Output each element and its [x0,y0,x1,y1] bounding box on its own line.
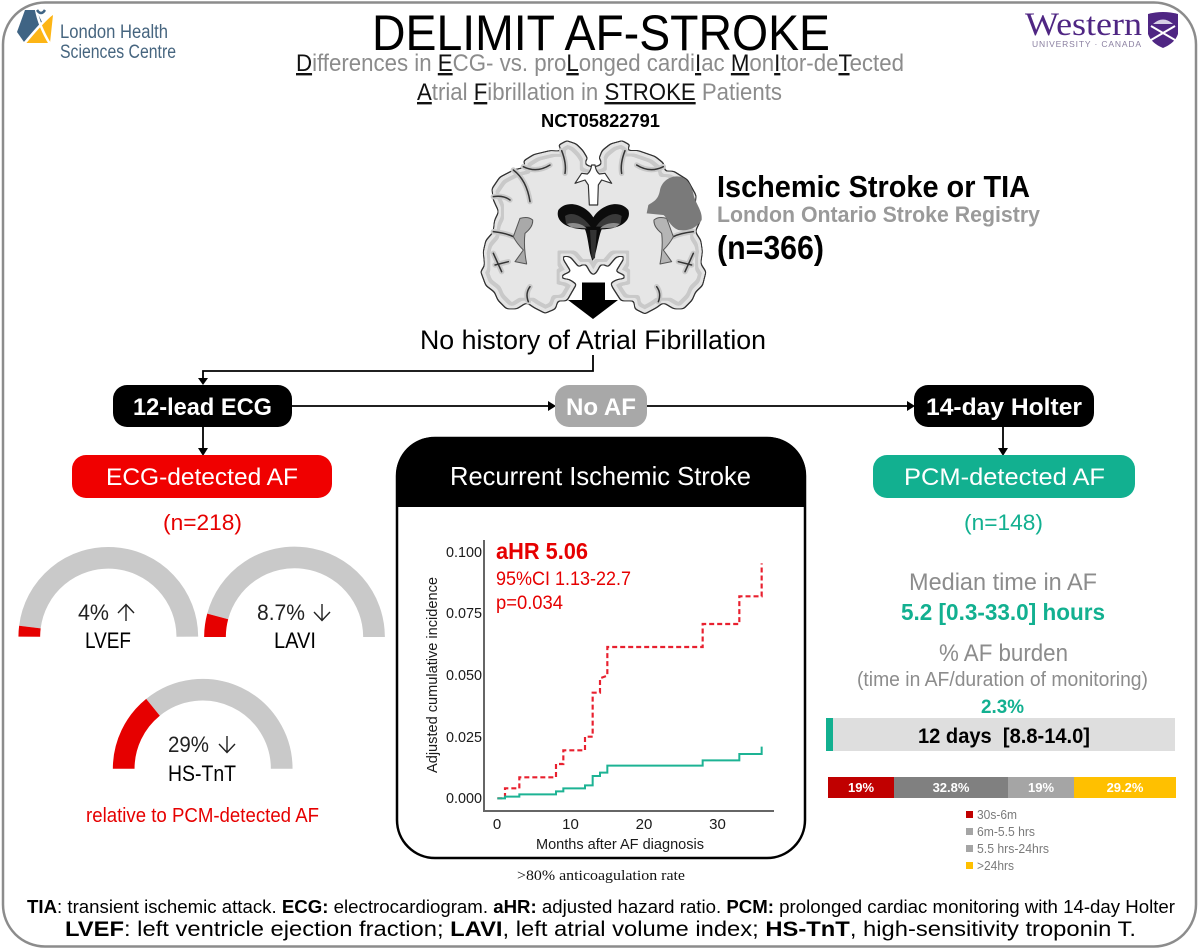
arrow: Holter down [998,427,1008,456]
cohort heading: London Ontario Stroke Registry [717,202,1041,227]
stacked bar: AF episode duration: 29.2% [1107,780,1144,795]
logo: Western University [1025,7,1178,49]
cohort heading [717,169,1041,266]
no history label: No history of Atrial Fibrillation [420,325,766,355]
note: relative to PCM: relative to PCM-detected AF [86,805,319,827]
hazard ratio statistics: 95%CI 1.13-22.7 [496,569,631,590]
legend [966,807,1049,873]
chart: adjusted cumulative incidence: 20 [636,816,652,833]
chart: adjusted cumulative incidence: 0.100 [446,544,482,561]
legend: 6m-5.5 hrs [977,824,1035,839]
gauge: LVEF: 4% [78,600,109,625]
logo: London Health Sciences Centre [17,9,176,63]
arrow: brain down to history [568,282,618,319]
stat: median time in AF: 5.2 [0.3-33.0] hours [901,599,1105,625]
cohort heading: Ischemic Stroke or TIA [717,169,1030,204]
chart: adjusted cumulative incidence: 0.000 [446,790,482,807]
logo: London Health Sciences Centre: London Health [60,22,168,43]
box: ECG-detected AF: ECG-detected AF [106,464,298,491]
curve: PCM-detected AF [497,747,762,798]
box: PCM-detected AF: PCM-detected AF [904,464,1105,491]
box: 14-day Holter: 14-day Holter [926,394,1082,421]
chart: adjusted cumulative incidence: Months after AF diagnosis [536,836,704,853]
logo: Western University: UNIVERSITY · CANADA [1032,39,1141,49]
chart: adjusted cumulative incidence: 0.075 [446,605,482,622]
box: No AF [555,385,647,427]
logo: Western University: Western [1025,7,1142,43]
box: No AF: No AF [566,394,636,421]
cohort heading: (n=366) [717,229,824,266]
box: PCM-detected AF [873,455,1135,498]
stat: AF burden: (time in AF/duration of monitoring) [857,669,1148,691]
stat: AF burden [857,640,1148,718]
stacked bar: AF episode duration: 19% [1028,780,1054,795]
icon: brain with ischemic lesion [480,140,707,315]
legend: 30s-6m [977,807,1017,822]
hazard ratio statistics [496,538,631,614]
gauge: LVEF: LVEF [85,628,131,653]
chart: adjusted cumulative incidence: 30 [709,816,726,833]
subtitle: Differences in ECG- vs. proLonged cardiIac MonItor-deTected [296,50,904,77]
gauge: LVEF [29,558,187,653]
box: 14-day Holter [914,385,1094,427]
label: n=218: (n=218) [163,510,242,535]
legend: >24hrs [977,858,1014,873]
chart: adjusted cumulative incidence [424,538,774,853]
panel heading: Recurrent Ischemic Stroke [450,461,751,491]
title: DELIMIT AF-STROKE [372,5,830,61]
note: anticoagulation rate: >80% anticoagulation rate [517,868,685,884]
footer abbreviations: TIA: transient ischemic attack. ECG: electrocardiogram. aHR: adjusted hazard ratio. PCM: prolonged cardiac monitoring with 14-day Holter [27,897,1175,917]
gauge: LAVI: LAVI [274,628,316,653]
legend: 5.5 hrs-24hrs [977,841,1049,856]
box: 12-lead ECG: 12-lead ECG [133,394,272,421]
chart: adjusted cumulative incidence: 0 [493,816,501,833]
gauge: HS-TnT: 29% [168,732,209,757]
chart: adjusted cumulative incidence: 0.050 [446,667,482,684]
stacked bar: AF episode duration [828,777,1176,798]
arrow: No AF to Holter [647,401,915,411]
stat: median time in AF [901,569,1105,625]
bar: monitoring duration [826,718,1175,751]
box: 12-lead ECG [113,385,292,427]
gauge: HS-TnT [124,690,282,786]
stat: median time in AF: Median time in AF [909,569,1097,596]
gauge: LAVI [215,557,374,653]
arrow: ECG to No AF [292,401,556,411]
arrow: ECG down [198,427,208,456]
gauge: LAVI: 8.7% [257,600,305,625]
stacked bar: AF episode duration: 32.8% [933,780,970,795]
stat: AF burden: 2.3% [981,697,1024,718]
box: ECG-detected AF [72,455,332,498]
stat: AF burden: % AF burden [939,640,1068,667]
logo: London Health Sciences Centre: Sciences Centre [60,42,176,63]
chart: adjusted cumulative incidence: Adjusted cumulative incidence [424,577,441,773]
footer abbreviations: LVEF : left ventricle ejection fraction; LAVI, left atrial volume index; HS-TnT , high-sensitivity troponin T. [65,917,1136,941]
chart: adjusted cumulative incidence: 0.025 [446,729,482,746]
gauge: HS-TnT: HS-TnT [168,761,236,786]
footer abbreviations [27,897,1175,941]
label: n=148: (n=148) [964,510,1043,535]
arrow: history to 12-lead ECG [198,355,593,385]
subtitle: Atrial Fibrillation in STROKE Patients [417,79,782,106]
bar: monitoring duration: 12 days [8.8-14.0] [918,725,1090,748]
panel: recurrent ischemic stroke [396,437,806,858]
trial registration number: NCT05822791 [541,111,660,131]
subtitle [296,50,904,106]
chart: adjusted cumulative incidence: 10 [562,816,579,833]
hazard ratio statistics: aHR 5.06 [496,538,588,564]
curve: ECG-detected AF [497,563,762,798]
stacked bar: AF episode duration: 19% [848,780,874,795]
hazard ratio statistics: p=0.034 [496,593,563,614]
